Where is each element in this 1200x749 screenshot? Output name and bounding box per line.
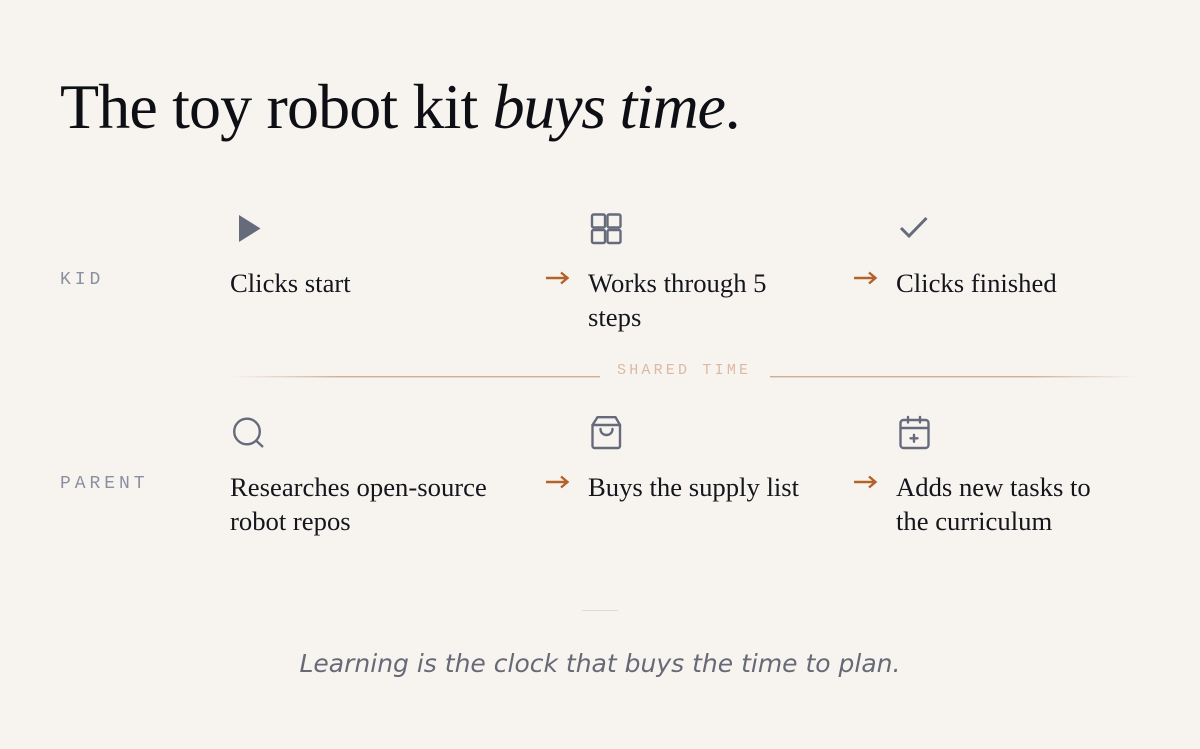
divider: shared time: SHARED TIME: [617, 362, 751, 379]
step: researches repos: [230, 472, 487, 536]
title: The toy robot kit buys time.: [60, 71, 740, 142]
icon: calendar plus: [899, 416, 930, 450]
row label: parent: PARENT: [60, 474, 149, 494]
closing line: Learning is the clock that buys the time to plan.: [300, 649, 900, 678]
step: researches repos: robot repos: [230, 506, 351, 536]
step: works through 5 steps: Works through 5: [588, 268, 767, 298]
step: clicks finished: Clicks finished: [896, 268, 1057, 298]
step: works through 5 steps: [588, 268, 767, 332]
step: adds new tasks: the curriculum: [896, 506, 1052, 536]
step: works through 5 steps: steps: [588, 302, 641, 332]
row label: kid: KID: [60, 270, 104, 290]
step: clicks start: Clicks start: [230, 268, 351, 298]
step: researches repos: Researches open-source: [230, 472, 487, 502]
arrow: kid step 1 to 2: [546, 272, 570, 284]
step: buys the supply list: Buys the supply list: [588, 472, 799, 502]
short rule: [582, 610, 618, 611]
icon: shopping bag: [591, 416, 622, 450]
icon: grid: [590, 213, 622, 244]
arrow: parent step 2 to 3: [854, 476, 878, 488]
icon: search: [233, 418, 264, 448]
arrow: kid step 2 to 3: [854, 272, 878, 284]
icon: play: [239, 215, 260, 242]
icon: check: [900, 217, 928, 238]
arrow: parent step 1 to 2: [546, 476, 570, 488]
step: adds new tasks: Adds new tasks to: [896, 472, 1091, 502]
step: adds new tasks: [896, 472, 1091, 536]
